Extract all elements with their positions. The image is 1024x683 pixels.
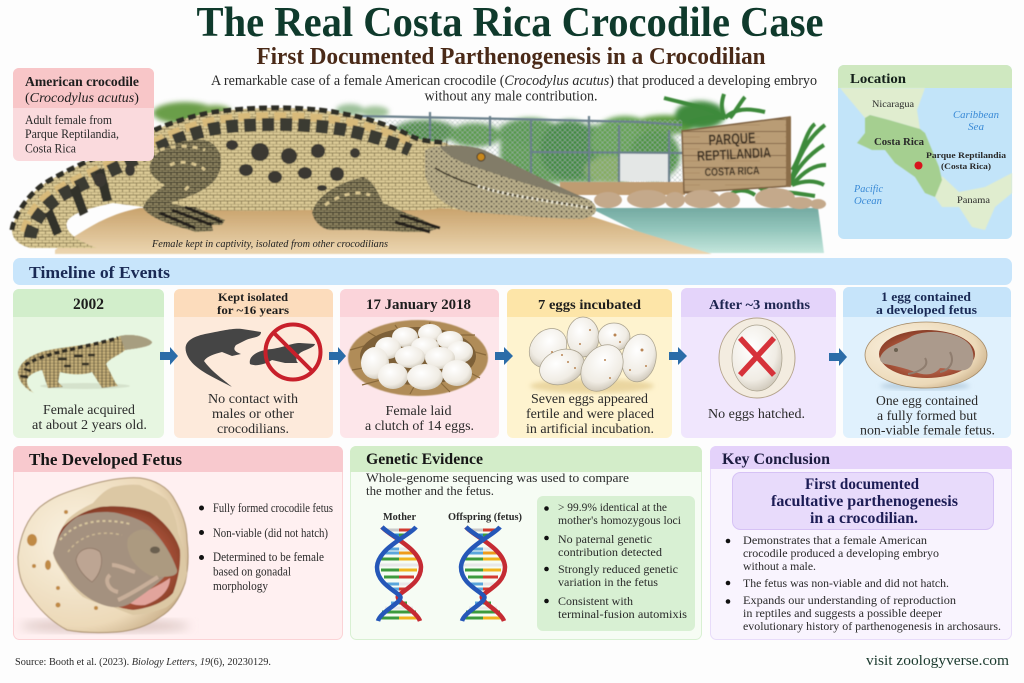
map labels: Caribbean bbox=[953, 110, 999, 121]
panel: key conclusion: Key Conclusion bbox=[722, 451, 830, 468]
fetus bullets: based on gonadal bbox=[213, 564, 292, 578]
intro text: A remarkable case of a female American crocodile (Crocodylus acutus) that produced a developing embryo bbox=[211, 73, 817, 89]
genetic findings bbox=[537, 496, 695, 631]
icon: young crocodile bbox=[18, 335, 152, 393]
map labels: (Costa Rica) bbox=[941, 161, 991, 171]
fetus bullets: morphology bbox=[213, 579, 269, 593]
fetus bullets: Fully formed crocodile fetus bbox=[213, 501, 333, 515]
crocodile front leg bbox=[312, 177, 440, 232]
arrow bbox=[495, 347, 513, 365]
card text bbox=[32, 402, 147, 432]
conclusion statement: facultative parthenogenesis bbox=[771, 493, 958, 510]
crocodile snout top bbox=[440, 146, 590, 200]
timeline card: after 3 months: After ~3 months bbox=[709, 298, 811, 313]
timeline card: developed fetus: a fully formed but bbox=[877, 408, 977, 423]
timeline card: 7 eggs incubated: Seven eggs appeared bbox=[531, 391, 648, 406]
timeline card: kept isolated: for ~16 years bbox=[217, 303, 289, 317]
genetic findings: Consistent with bbox=[558, 594, 633, 608]
conclusion bullets: without a male. bbox=[743, 561, 816, 573]
conclusion bullets: crocodile produced a developing embryo bbox=[743, 548, 939, 560]
species description: Adult female from bbox=[25, 113, 112, 127]
conclusion statement bbox=[732, 472, 994, 530]
timeline card: after 3 months: No eggs hatched. bbox=[708, 406, 805, 421]
timeline card: kept isolated: males or other bbox=[212, 406, 295, 421]
hero caption: Female kept in captivity, isolated from other crocodilians bbox=[151, 239, 388, 250]
genetic findings: Strongly reduced genetic bbox=[558, 562, 678, 576]
arrow bbox=[329, 347, 346, 365]
map labels: Ocean bbox=[854, 196, 882, 207]
hero sign: Parque Reptilandia: PARQUE bbox=[708, 130, 756, 149]
conclusion bullets: in reptiles and suggests a possible deeper bbox=[743, 608, 942, 620]
map labels bbox=[853, 100, 1007, 207]
timeline card: 7 eggs incubated bbox=[507, 289, 672, 438]
DNA: mother bbox=[377, 512, 421, 621]
map labels: Parque Reptilandia bbox=[926, 150, 1007, 160]
arrow bbox=[160, 347, 178, 365]
icon: nest with eggs bbox=[348, 320, 488, 396]
crocodile dorsal scutes bbox=[12, 108, 447, 238]
map labels: Sea bbox=[968, 122, 984, 133]
map labels: Pacific bbox=[853, 184, 884, 195]
intro text: without any male contribution. bbox=[424, 88, 598, 104]
card text: Female acquired bbox=[43, 402, 135, 417]
timeline heading bar: Timeline of Events bbox=[29, 263, 170, 282]
timeline card: 2002 bbox=[13, 289, 164, 438]
genetic findings: contribution detected bbox=[558, 545, 662, 559]
map labels: Panama bbox=[957, 196, 991, 206]
conclusion statement: First documented bbox=[805, 476, 919, 493]
crocodile eye bbox=[477, 153, 485, 161]
website credit: visit zoologyverse.com bbox=[866, 653, 1009, 669]
DNA: offspring: Offspring (fetus) bbox=[448, 512, 522, 523]
timeline card: developed fetus: a developed fetus bbox=[876, 303, 977, 317]
crocodile tail and body bbox=[12, 108, 500, 248]
genetic findings: > 99.9% identical at the bbox=[558, 500, 667, 514]
timeline card: developed fetus: 1 egg contained bbox=[881, 290, 971, 304]
hero illustration: captive crocodile at Parque Reptilandia bbox=[12, 94, 826, 254]
intro text bbox=[211, 73, 817, 104]
conclusion bullets: Expands our understanding of reproduction bbox=[743, 595, 956, 607]
genetic method text: Whole-genome sequencing was used to compare bbox=[366, 471, 629, 485]
panel: the developed fetus: The Developed Fetus bbox=[29, 450, 182, 469]
species description bbox=[25, 113, 119, 156]
timeline card: kept isolated: No contact with bbox=[208, 391, 298, 406]
hero wall bbox=[560, 182, 685, 195]
timeline card: 7 eggs incubated: fertile and were placed bbox=[526, 406, 654, 421]
icon: second crocodile silhouette bbox=[250, 343, 315, 365]
hero sign: Parque Reptilandia bbox=[682, 117, 791, 193]
species description: Costa Rica bbox=[25, 142, 76, 156]
map labels: Costa Rica bbox=[874, 137, 925, 148]
timeline card: developed fetus bbox=[843, 287, 1011, 438]
timeline card: kept isolated bbox=[174, 289, 333, 438]
species description: Parque Reptilandia, bbox=[25, 127, 119, 141]
panel: key conclusion bbox=[710, 446, 1012, 640]
hero rocks bbox=[594, 188, 826, 209]
genetic findings: terminal-fusion automixis bbox=[558, 607, 687, 621]
panel: species label bbox=[13, 68, 154, 161]
conclusion bullets: Demonstrates that a female American bbox=[743, 535, 927, 547]
timeline card: 7 eggs incubated: 7 eggs incubated bbox=[538, 298, 641, 313]
timeline card: 17 January 2018: a clutch of 14 eggs. bbox=[365, 418, 474, 433]
timeline card: 7 eggs incubated: in artificial incubation. bbox=[526, 421, 654, 436]
map labels: Nicaragua bbox=[872, 100, 915, 110]
fetus bullets bbox=[199, 501, 333, 593]
crocodile body blotches bbox=[94, 140, 360, 191]
conclusion bullets bbox=[726, 535, 1001, 633]
hero sign: Parque Reptilandia: REPTILANDIA bbox=[697, 144, 771, 164]
hero water bbox=[590, 208, 824, 253]
genetic findings: variation in the fetus bbox=[558, 575, 658, 589]
timeline heading bar bbox=[13, 258, 1012, 285]
fetus bullets: Non-viable (did not hatch) bbox=[213, 526, 328, 540]
title: The Real Costa Rica Crocodile Case bbox=[196, 0, 824, 46]
map marker bbox=[914, 162, 922, 170]
species name: (Crocodylus acutus) bbox=[25, 91, 139, 106]
hero sand bank bbox=[55, 208, 712, 254]
illustration: opened egg with fetus bbox=[18, 478, 190, 633]
timeline card: developed fetus: One egg contained bbox=[876, 393, 978, 408]
timeline card: after 3 months bbox=[681, 288, 836, 438]
timeline card: developed fetus: non-viable female fetus. bbox=[860, 422, 995, 438]
timeline card: 17 January 2018: 17 January 2018 bbox=[366, 297, 471, 313]
species name bbox=[25, 75, 139, 106]
icon: egg with fetus bbox=[865, 322, 987, 390]
timeline card: 17 January 2018 bbox=[340, 289, 499, 438]
source citation: Source: Booth et al. (2023). Biology Letters, 19(6), 20230129. bbox=[15, 657, 271, 668]
timeline card: kept isolated: Kept isolated bbox=[218, 290, 288, 304]
hero palm leaves bbox=[664, 94, 826, 196]
panel: the developed fetus bbox=[13, 446, 343, 640]
conclusion bullets: evolutionary history of parthenogenesis in archosaurs. bbox=[743, 621, 1001, 633]
card text: at about 2 years old. bbox=[32, 417, 147, 432]
panel: location map bbox=[838, 65, 1012, 239]
panel: genetic evidence: Genetic Evidence bbox=[366, 451, 483, 468]
panel: genetic evidence bbox=[350, 446, 702, 640]
arrow bbox=[669, 347, 687, 365]
conclusion statement: in a crocodilian. bbox=[810, 510, 918, 527]
crocodile tail bands bbox=[45, 168, 112, 236]
species name: American crocodile bbox=[25, 75, 139, 90]
crocodile jaw line and teeth bbox=[435, 168, 592, 208]
genetic method text: the mother and the fetus. bbox=[366, 484, 494, 498]
icon: crocodile silhouette bbox=[186, 329, 261, 387]
arrow bbox=[829, 348, 847, 366]
icon: prohibition sign bbox=[266, 324, 320, 380]
icon: seven eggs bbox=[521, 317, 660, 399]
genetic findings: No paternal genetic bbox=[558, 532, 652, 546]
crocodile head bbox=[425, 145, 596, 219]
timeline card: 17 January 2018: Female laid bbox=[386, 403, 452, 418]
icon: failed egg with red cross bbox=[719, 318, 795, 398]
hero fence bbox=[360, 112, 682, 182]
map: land bbox=[840, 88, 1012, 230]
location heading: Location bbox=[850, 72, 906, 87]
hero backdrop: trees bbox=[153, 101, 725, 184]
fetus bullets: Determined to be female bbox=[213, 550, 324, 564]
DNA: offspring bbox=[448, 512, 522, 621]
DNA: mother: Mother bbox=[383, 512, 417, 523]
genetic findings: mother's homozygous loci bbox=[558, 513, 682, 527]
subtitle: First Documented Parthenogenesis in a Crocodilian bbox=[256, 44, 766, 70]
timeline card: kept isolated: crocodilians. bbox=[217, 421, 289, 436]
crocodile rear leg bbox=[143, 140, 225, 232]
timeline card: 2002: 2002 bbox=[73, 296, 104, 313]
conclusion bullets: The fetus was non-viable and did not hatch. bbox=[743, 578, 949, 590]
hero sign: Parque Reptilandia: COSTA RICA bbox=[704, 165, 760, 179]
genetic method text bbox=[366, 471, 629, 498]
